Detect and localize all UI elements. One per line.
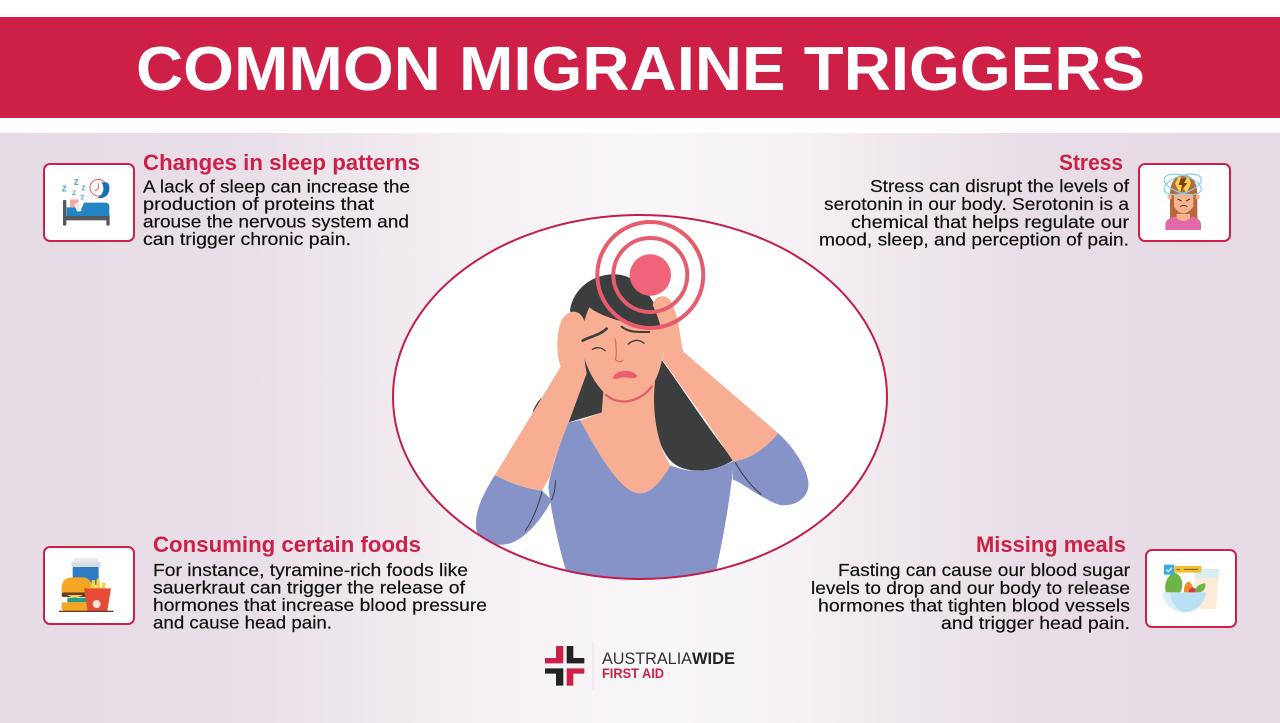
neck and chest xyxy=(580,382,671,493)
mouth xyxy=(613,371,637,379)
icon: bed and clock: z xyxy=(81,183,86,193)
right sleeve xyxy=(733,433,808,505)
body text: mood, sleep, and perception of pain. xyxy=(819,230,1129,250)
title banner xyxy=(0,17,1280,118)
icon: bed and clock: z xyxy=(72,188,76,197)
body text xyxy=(153,560,487,632)
body text: sauerkraut can trigger the release of xyxy=(153,578,465,598)
icon: stressed woman xyxy=(1139,164,1230,241)
panel: stress xyxy=(819,150,1230,250)
panel: central illustration xyxy=(393,215,887,582)
heading: Consuming certain foods xyxy=(153,532,421,557)
left sleeve xyxy=(476,475,552,545)
logo mark xyxy=(545,641,593,690)
logo: Australia Wide First Aid: FIRST AID xyxy=(602,665,664,681)
body text xyxy=(819,176,1129,250)
body text: and cause head pain. xyxy=(153,612,332,632)
facial features xyxy=(525,327,761,531)
body text: serotonin in our body. Serotonin is a xyxy=(824,194,1129,214)
title: COMMON MIGRAINE TRIGGERS xyxy=(136,35,1145,104)
heading: Stress xyxy=(1059,150,1123,175)
body text: production of proteins that xyxy=(143,194,374,214)
body text: chemical that helps regulate our xyxy=(851,212,1129,232)
body text xyxy=(811,560,1130,633)
right arm xyxy=(653,296,778,462)
hair xyxy=(533,274,733,471)
oval outline xyxy=(393,215,887,579)
panel: consuming certain foods xyxy=(44,532,487,632)
white oval xyxy=(393,215,887,579)
heading: Missing meals xyxy=(976,532,1126,557)
body text: arouse the nervous system and xyxy=(143,212,409,232)
icon: burger, fries and drink xyxy=(44,547,134,624)
body text: can trigger chronic pain. xyxy=(143,229,351,249)
body text: Stress can disrupt the levels of xyxy=(870,176,1129,196)
body text: hormones that tighten blood vessels xyxy=(818,596,1130,616)
body text: and trigger head pain. xyxy=(941,613,1130,633)
icon: bed and clock: z xyxy=(74,176,79,188)
panel: changes in sleep patterns xyxy=(44,150,420,249)
body text xyxy=(143,176,410,249)
logo: Australia Wide First Aid xyxy=(545,641,735,690)
panel: missing meals xyxy=(811,532,1236,633)
icon: salad bowl and checklist xyxy=(1146,550,1236,627)
pain target rings xyxy=(597,222,703,328)
icon: bed and clock: z xyxy=(62,182,67,194)
icon: bed and clock xyxy=(44,164,134,241)
body text: Fasting can cause our blood sugar xyxy=(838,560,1130,580)
logo: Australia Wide First Aid: WIDE xyxy=(692,649,735,668)
icon: bed and clock: z xyxy=(80,192,84,201)
face xyxy=(584,307,664,392)
body text: For instance, tyramine-rich foods like xyxy=(153,560,468,580)
body text: A lack of sleep can increase the xyxy=(143,176,410,196)
nose xyxy=(615,338,623,362)
heading: Changes in sleep patterns xyxy=(143,150,420,175)
neck line xyxy=(606,387,652,401)
body text: levels to drop and our body to release xyxy=(811,578,1130,598)
woman with headache xyxy=(476,274,808,582)
left arm xyxy=(495,312,587,491)
body text: hormones that increase blood pressure xyxy=(153,595,487,615)
torso xyxy=(548,420,734,582)
logo wordmark: AUSTRALIA xyxy=(602,649,693,668)
